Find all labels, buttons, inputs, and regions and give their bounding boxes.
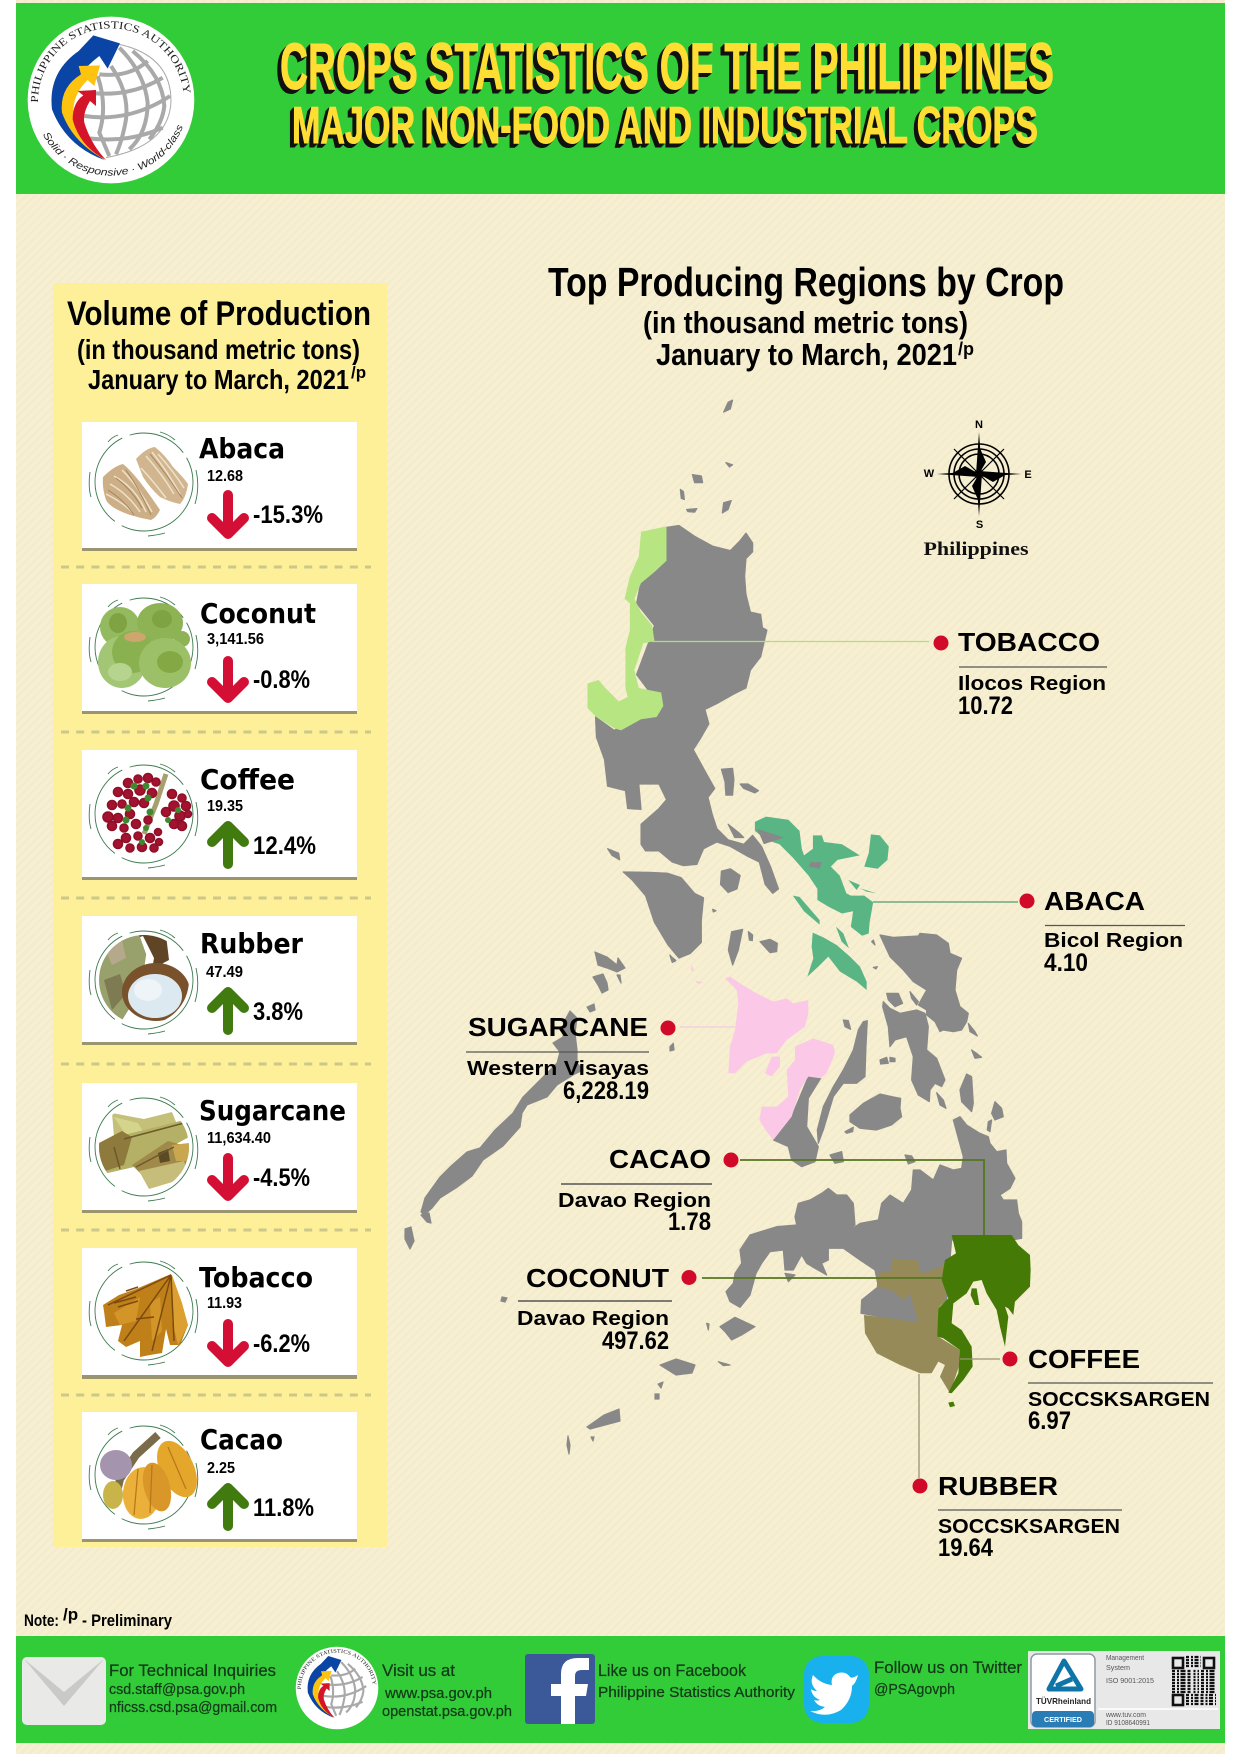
QR code <box>1172 1657 1216 1705</box>
panel heading: (in thousand metric tons) <box>77 334 360 365</box>
callout: cacao: CACAO <box>609 1144 711 1174</box>
callout: tobacco: Ilocos Region <box>958 673 1106 695</box>
region: Ilocos <box>587 526 667 730</box>
title <box>280 29 1054 155</box>
region: SOCCSKSARGEN <box>864 1258 960 1393</box>
note <box>24 1605 172 1630</box>
heading: top producing regions <box>548 259 1064 372</box>
callout: coffee: SOCCSKSARGEN <box>1028 1389 1210 1411</box>
icon: compass rose: W <box>924 468 935 480</box>
card: sugarcane: -4.5% <box>253 1164 310 1192</box>
card: coconut <box>82 584 357 714</box>
callout: abaca: ABACA <box>1044 886 1145 916</box>
card: abaca: -15.3% <box>253 501 323 529</box>
callout: tobacco: 10.72 <box>958 692 1013 720</box>
callout: sugarcane: 6,228.19 <box>563 1077 649 1105</box>
card: abaca: Abaca <box>199 432 285 465</box>
icon: facebook <box>525 1654 595 1724</box>
icon: compass rose: E <box>1024 469 1032 481</box>
card: cacao: 2.25 <box>207 1460 235 1477</box>
callout: cacao: 1.78 <box>668 1208 711 1236</box>
callout: coffee: COFFEE <box>1028 1344 1140 1374</box>
text: technical inquiries: For Technical Inquiries <box>109 1661 276 1680</box>
callout: sugarcane <box>466 1012 736 1105</box>
card: tobacco: Tobacco <box>199 1261 313 1294</box>
text: technical inquiries <box>109 1661 277 1716</box>
text: website: Visit us at <box>382 1661 455 1680</box>
map: Sulu islands <box>501 1297 695 1454</box>
badge: TUV Rheinland certification: www.tuv.com <box>1105 1710 1146 1719</box>
text: website: openstat.psa.gov.ph <box>382 1703 512 1720</box>
panel heading: Volume of Production <box>67 295 371 333</box>
icon: abaca fibre <box>89 432 198 536</box>
callout: rubber: 19.64 <box>938 1534 993 1562</box>
region: Bicol, Masbate <box>807 880 877 990</box>
icon: sugarcane stalks <box>89 1097 198 1201</box>
card: tobacco: -6.2% <box>253 1330 310 1358</box>
heading: top producing regions: /p <box>958 339 974 359</box>
logo text: agency name: PHILIPPINE STATISTICS AUTHORITY <box>30 21 191 102</box>
callout: tobacco <box>652 627 1107 720</box>
logo text: motto: Solid · Responsive · World-class <box>44 125 182 176</box>
callout: coconut: 497.62 <box>602 1327 669 1355</box>
card: coconut: 3,141.56 <box>207 631 264 648</box>
card: sugarcane <box>82 1083 357 1213</box>
text: twitter <box>874 1658 1022 1698</box>
text: twitter: @PSAgovph <box>874 1681 955 1698</box>
card: coconut: Coconut <box>200 597 316 630</box>
map: Palawan <box>405 952 625 1249</box>
arrow: down <box>212 1324 244 1362</box>
map of the Philippines <box>405 400 1031 1454</box>
icon: PSA logo <box>28 16 194 184</box>
card: sugarcane: Sugarcane <box>199 1094 346 1127</box>
icon: compass rose: Philippines <box>924 539 1028 560</box>
card: tobacco <box>82 1248 357 1379</box>
callout: cacao: Davao Region <box>558 1190 711 1212</box>
callout: abaca: Bicol Region <box>1044 930 1183 952</box>
callout: rubber <box>912 1374 1122 1562</box>
panel heading: January to March, 2021 <box>88 364 349 395</box>
icon: compass rose: S <box>976 519 983 531</box>
icon: compass rose: N <box>975 419 983 431</box>
note: /p <box>63 1605 78 1624</box>
region: Davao <box>937 1235 1031 1407</box>
header banner <box>16 3 1225 194</box>
arrow: down <box>212 661 244 698</box>
card: abaca: 12.68 <box>207 468 243 485</box>
map: Visayas <box>670 880 1003 1167</box>
callout: sugarcane: SUGARCANE <box>468 1012 648 1042</box>
panel heading: /p <box>351 363 366 382</box>
callout: coconut <box>517 1263 942 1355</box>
badge: TUV Rheinland certification <box>1028 1651 1220 1729</box>
card: sugarcane: 11,634.40 <box>207 1130 271 1147</box>
icon: PSA logo small: PHILIPPINE STATISTICS AUTHORITY <box>297 1649 376 1690</box>
card: rubber <box>82 916 357 1045</box>
card: coffee: 12.4% <box>253 832 316 860</box>
text: website <box>382 1661 512 1720</box>
note: - Preliminary <box>82 1611 172 1630</box>
callout: rubber: RUBBER <box>938 1471 1058 1501</box>
heading: top producing regions: Top Producing Regions by Crop <box>548 259 1064 305</box>
card: coffee <box>82 750 357 880</box>
heading: top producing regions: January to March, 2021 <box>656 337 957 372</box>
badge: TUV Rheinland certification: CERTIFIED <box>1044 1715 1083 1724</box>
badge: TUV Rheinland certification: ISO 9001:2015 <box>1106 1676 1154 1685</box>
text: facebook: Philippine Statistics Authority <box>598 1684 796 1701</box>
badge: TUV Rheinland certification: System <box>1106 1663 1130 1672</box>
card: tobacco: 11.93 <box>207 1295 242 1312</box>
text: facebook: Like us on Facebook <box>598 1661 746 1680</box>
arrow: down <box>212 1158 244 1196</box>
icon: coconuts <box>89 597 198 701</box>
card: rubber: Rubber <box>200 927 303 960</box>
icon: compass rose <box>924 419 1032 560</box>
arrow: down <box>212 495 244 534</box>
callout: tobacco: TOBACCO <box>958 627 1100 657</box>
text: technical inquiries: csd.staff@psa.gov.ph <box>109 1681 245 1698</box>
text: technical inquiries: nficss.csd.psa@gmail.com <box>109 1699 277 1716</box>
callout: cacao <box>558 1144 984 1236</box>
callout: coconut: COCONUT <box>526 1263 669 1293</box>
card: rubber: 47.49 <box>206 964 243 981</box>
callout: abaca <box>873 886 1185 977</box>
callout: coffee: 6.97 <box>1028 1407 1071 1435</box>
icon: twitter <box>804 1656 869 1723</box>
text: website: www.psa.gov.ph <box>384 1685 492 1702</box>
callout: coconut: Davao Region <box>517 1308 669 1330</box>
arrow: up <box>212 1488 244 1526</box>
callout: coffee <box>960 1344 1213 1435</box>
panel: volume of production <box>53 283 387 1547</box>
badge: TUV Rheinland certification: Management <box>1106 1653 1145 1662</box>
arrow: up <box>212 992 244 1030</box>
card: coffee: 19.35 <box>207 798 243 815</box>
text: twitter: Follow us on Twitter <box>874 1658 1022 1677</box>
icon: tobacco leaves <box>89 1261 198 1365</box>
icon: coffee berries <box>89 764 198 868</box>
text: facebook <box>598 1661 796 1701</box>
note: Note: <box>24 1611 59 1630</box>
card: cacao: Cacao <box>200 1423 283 1456</box>
card: rubber: 3.8% <box>253 998 303 1026</box>
card: coffee: Coffee <box>200 763 295 796</box>
icon: cacao pods <box>89 1425 205 1529</box>
icon: envelope <box>22 1657 106 1725</box>
card: cacao: 11.8% <box>253 1494 314 1522</box>
map: Mindanao <box>707 1117 1031 1407</box>
badge: TUV Rheinland certification: ID 9108640991 <box>1106 1718 1150 1727</box>
callout: rubber: SOCCSKSARGEN <box>938 1516 1120 1538</box>
callout: sugarcane: Western Visayas <box>467 1058 649 1080</box>
footer banner <box>16 1636 1225 1743</box>
panel heading <box>67 295 371 395</box>
map: Luzon <box>587 400 889 963</box>
region: Bicol <box>755 817 889 936</box>
heading: top producing regions: (in thousand metric tons) <box>643 305 968 340</box>
region: Western Visayas <box>691 965 835 1140</box>
arrow: up <box>212 826 244 864</box>
callout: abaca: 4.10 <box>1044 949 1088 977</box>
card: coconut: -0.8% <box>253 666 310 694</box>
badge: TUV Rheinland certification: TÜVRheinland <box>1036 1696 1091 1706</box>
icon: PSA logo small <box>296 1646 378 1730</box>
card: abaca <box>82 422 357 551</box>
card: cacao <box>82 1412 357 1542</box>
icon: rubber latex cup <box>89 930 198 1034</box>
